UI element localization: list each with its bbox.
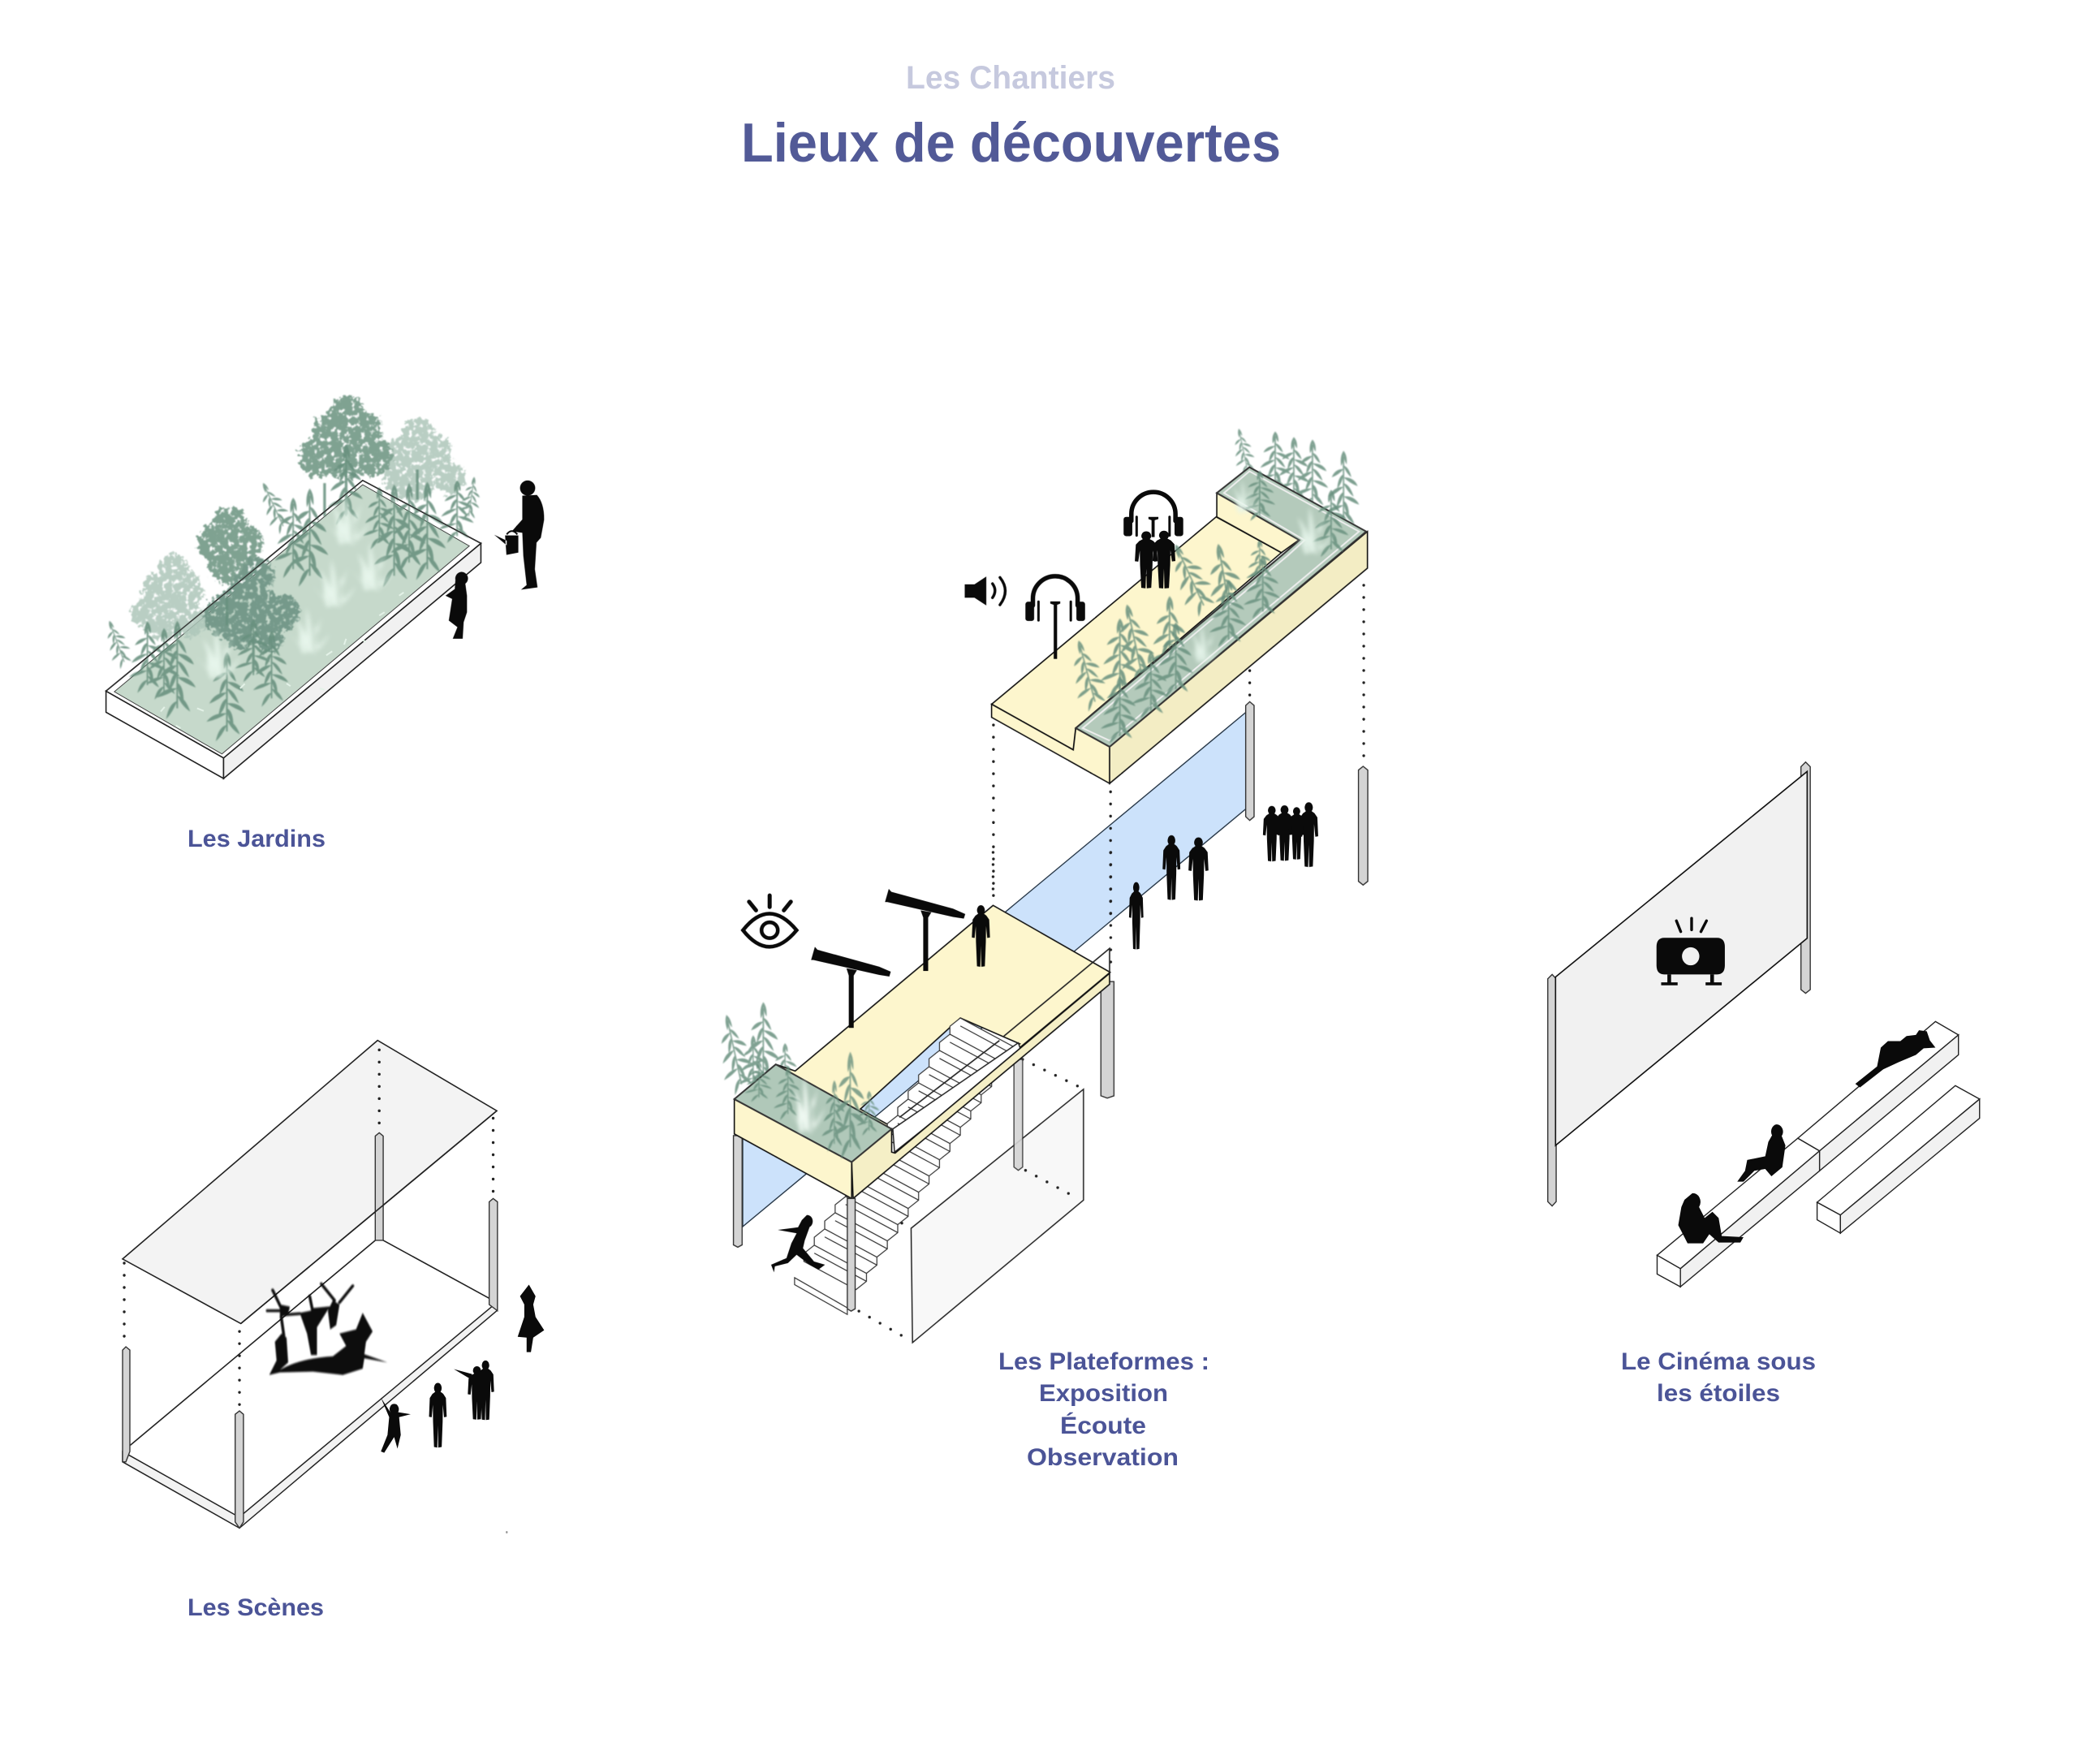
garden drawing xyxy=(99,395,544,778)
bamboo xyxy=(99,445,483,741)
scattered leaves xyxy=(161,593,403,728)
label: Les Scènes: Les Scènes xyxy=(188,1594,324,1621)
platform walkway xyxy=(992,517,1282,750)
dotted links xyxy=(859,852,1110,1338)
planter box xyxy=(106,481,481,778)
pale grasses xyxy=(1185,480,1334,662)
label: Le Cinéma: Le Cinéma sous xyxy=(1621,1348,1816,1375)
sitting person on end xyxy=(1679,1193,1744,1244)
stray mark xyxy=(506,1531,508,1533)
group of people xyxy=(1263,802,1318,867)
back post xyxy=(375,1132,383,1240)
dotted links xyxy=(124,1050,494,1407)
couple xyxy=(454,1361,494,1420)
trees xyxy=(131,395,467,651)
dotted links xyxy=(994,585,1364,919)
bench middle xyxy=(1798,1021,1959,1171)
visitor by wall xyxy=(1129,882,1144,950)
sitting person xyxy=(1737,1124,1786,1182)
back post xyxy=(1014,1059,1023,1171)
bench right xyxy=(1817,1085,1980,1233)
dancers xyxy=(267,1284,387,1375)
cinema drawing xyxy=(1548,762,1980,1287)
upper platform xyxy=(964,427,1368,919)
stairs xyxy=(795,1018,1012,1314)
telescope xyxy=(811,947,890,1028)
stage drawing xyxy=(123,1041,544,1533)
headphones on post, upper xyxy=(1123,492,1183,537)
subtitle: Les Chantiers xyxy=(906,60,1115,96)
person on platform xyxy=(972,905,990,967)
left post xyxy=(1548,974,1556,1206)
faces xyxy=(992,704,1110,783)
pale grass xyxy=(787,1076,826,1132)
back rim xyxy=(106,481,481,691)
pale grasses xyxy=(194,493,394,678)
panel: Les Jardins xyxy=(99,395,544,852)
label: Le Cinéma: les étoiles xyxy=(1657,1380,1780,1407)
platform deck xyxy=(776,905,1110,1152)
panel: Le Cinéma sous les étoiles xyxy=(1548,762,1980,1407)
bamboo behind planter xyxy=(1063,427,1359,714)
wall post xyxy=(1246,701,1254,821)
screen xyxy=(1555,771,1807,1145)
planter plants xyxy=(744,1052,881,1159)
right post xyxy=(1101,981,1114,1098)
telescope xyxy=(885,889,965,971)
panel: Les Scènes xyxy=(123,1041,544,1621)
visitor xyxy=(1162,835,1180,900)
planter xyxy=(735,1064,891,1162)
label: Les Plateformes: Écoute xyxy=(1060,1412,1146,1439)
couple silhouette xyxy=(1135,531,1175,589)
translucent wall xyxy=(911,1089,1084,1343)
glass line xyxy=(1004,948,1110,1036)
planter xyxy=(1076,467,1366,747)
right post xyxy=(1801,762,1810,994)
title: Lieux de découvertes xyxy=(741,112,1281,174)
reclining person xyxy=(1856,1030,1935,1088)
stage floor xyxy=(123,1240,497,1528)
roof xyxy=(123,1041,497,1323)
label: Les Plateformes: Observation xyxy=(1027,1444,1179,1471)
bamboo behind planter xyxy=(711,1002,798,1098)
roof edge over post xyxy=(241,1111,497,1323)
label: Les Plateformes: Exposition xyxy=(1039,1380,1168,1407)
woman with child xyxy=(429,1383,446,1447)
posts xyxy=(123,1198,498,1528)
planter plants xyxy=(1101,471,1348,744)
projector icon xyxy=(1657,918,1725,986)
visitor xyxy=(1188,838,1209,900)
running child xyxy=(771,1215,825,1272)
headphones on post, lower xyxy=(1025,576,1085,659)
child xyxy=(446,571,468,639)
ballerina xyxy=(518,1285,544,1352)
yellow faces xyxy=(735,973,1110,1198)
person with watering can xyxy=(494,481,544,589)
bench front xyxy=(1657,1138,1820,1287)
label: Le Cinéma xyxy=(1621,1348,1816,1407)
rail face xyxy=(893,1043,1021,1152)
label: Les Plateformes xyxy=(998,1348,1209,1471)
eye icon xyxy=(743,895,796,947)
label: Les Plateformes: Les Plateformes : xyxy=(998,1348,1209,1375)
rail line over steps xyxy=(899,1041,999,1117)
label: Les Jardins: Les Jardins xyxy=(188,826,325,852)
child with raised arm xyxy=(381,1398,411,1453)
front post xyxy=(847,1198,855,1311)
far post xyxy=(1359,766,1368,885)
left post xyxy=(734,1136,742,1247)
panel: Les Plateformes xyxy=(711,427,1368,1471)
speaker icon xyxy=(964,576,1005,606)
blue projection wall xyxy=(743,709,1249,1227)
lower platform xyxy=(711,852,1144,1343)
